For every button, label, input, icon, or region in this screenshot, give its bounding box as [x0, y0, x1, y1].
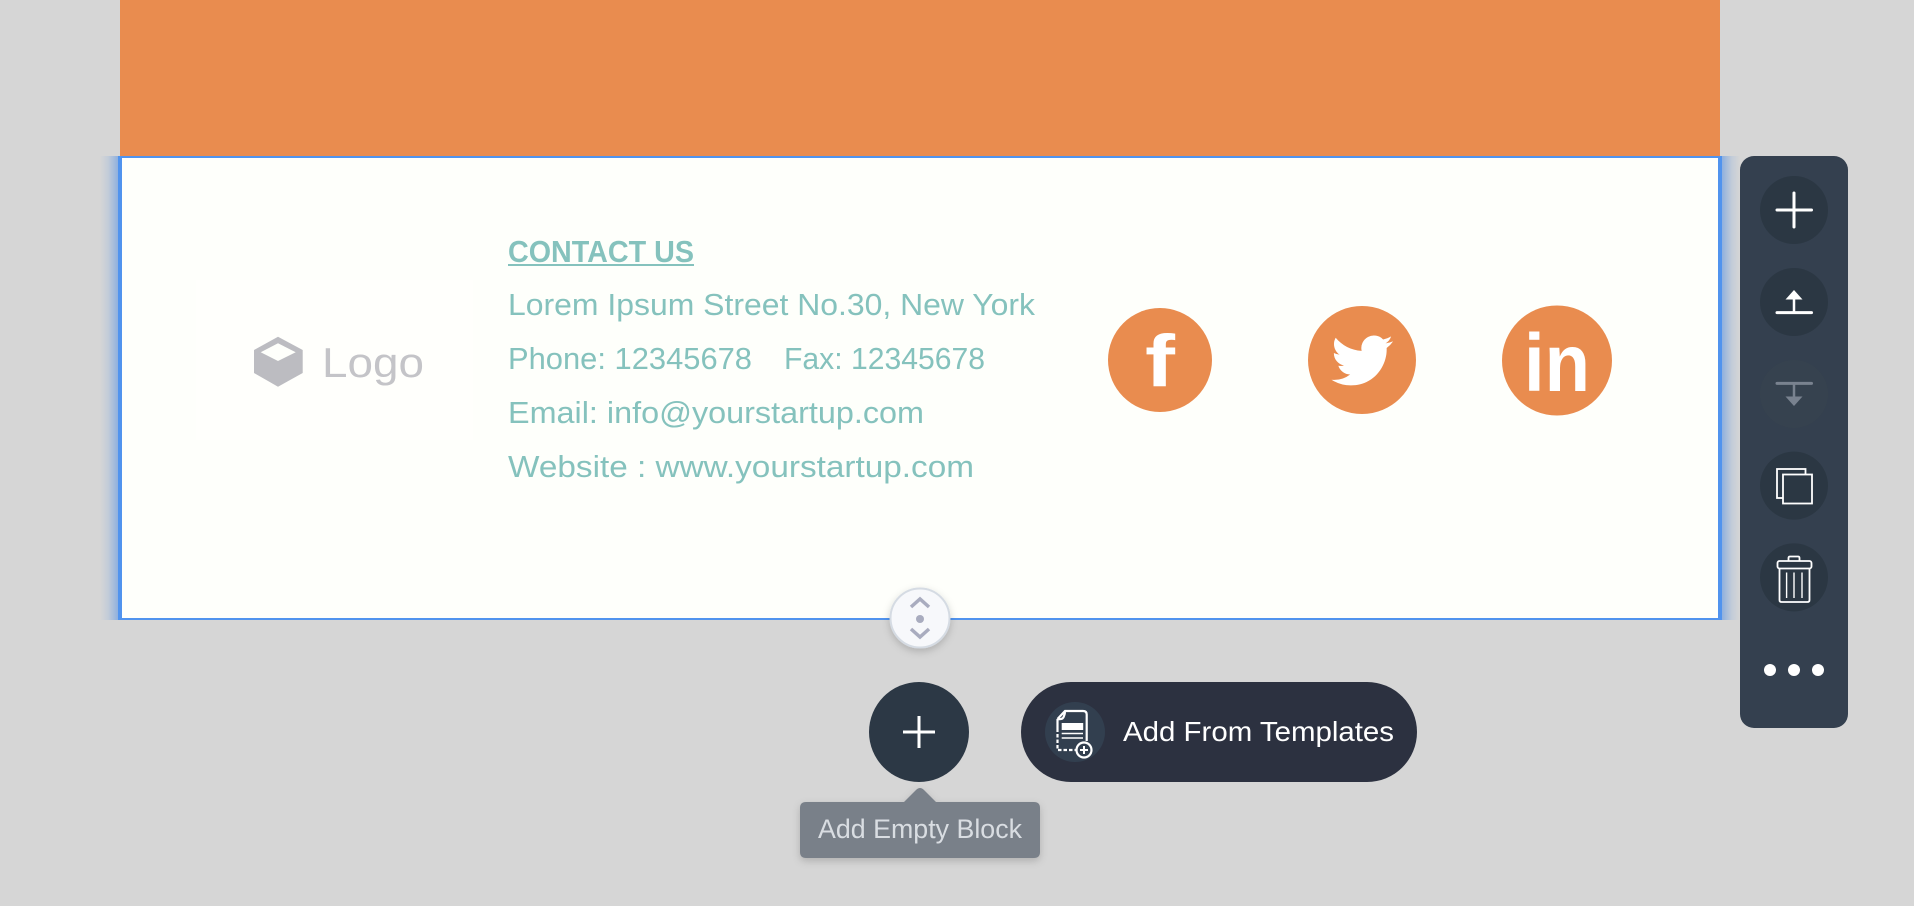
contact heading: CONTACT US — [508, 234, 694, 269]
icon: add — [1760, 176, 1828, 244]
icon: move down disabled — [1760, 360, 1828, 428]
icon: delete — [1760, 543, 1828, 611]
phone and fax: Fax: 12345678 — [784, 341, 985, 376]
website: Website : www.yourstartup.com — [508, 449, 974, 484]
block toolbar — [1740, 156, 1848, 728]
resize handle — [890, 588, 950, 648]
logo: Logo — [322, 339, 424, 386]
add from templates button — [1021, 682, 1417, 782]
contact details — [508, 234, 1036, 484]
icon: linkedin — [1502, 306, 1612, 416]
logo — [196, 280, 473, 440]
add from templates button: Add From Templates — [1123, 716, 1394, 747]
selected contact block — [100, 156, 1740, 620]
icon: facebook — [1108, 308, 1212, 412]
icon: facebook: f — [1145, 321, 1176, 402]
address: Lorem Ipsum Street No.30, New York — [508, 287, 1036, 322]
phone and fax: Phone: 12345678 — [508, 341, 752, 376]
icon: more options — [1764, 664, 1824, 676]
tooltip: add empty block: Add Empty Block — [818, 814, 1022, 844]
icon: linkedin: in — [1524, 318, 1590, 409]
orange block — [120, 0, 1720, 156]
add empty block button — [869, 682, 969, 782]
email: Email: info@yourstartup.com — [508, 395, 924, 430]
icon: twitter — [1308, 306, 1416, 414]
phone and fax — [508, 341, 985, 376]
icon: template document — [1045, 702, 1105, 762]
icon: duplicate — [1760, 452, 1828, 520]
tooltip: add empty block — [800, 788, 1040, 858]
icon: move up — [1760, 268, 1828, 336]
